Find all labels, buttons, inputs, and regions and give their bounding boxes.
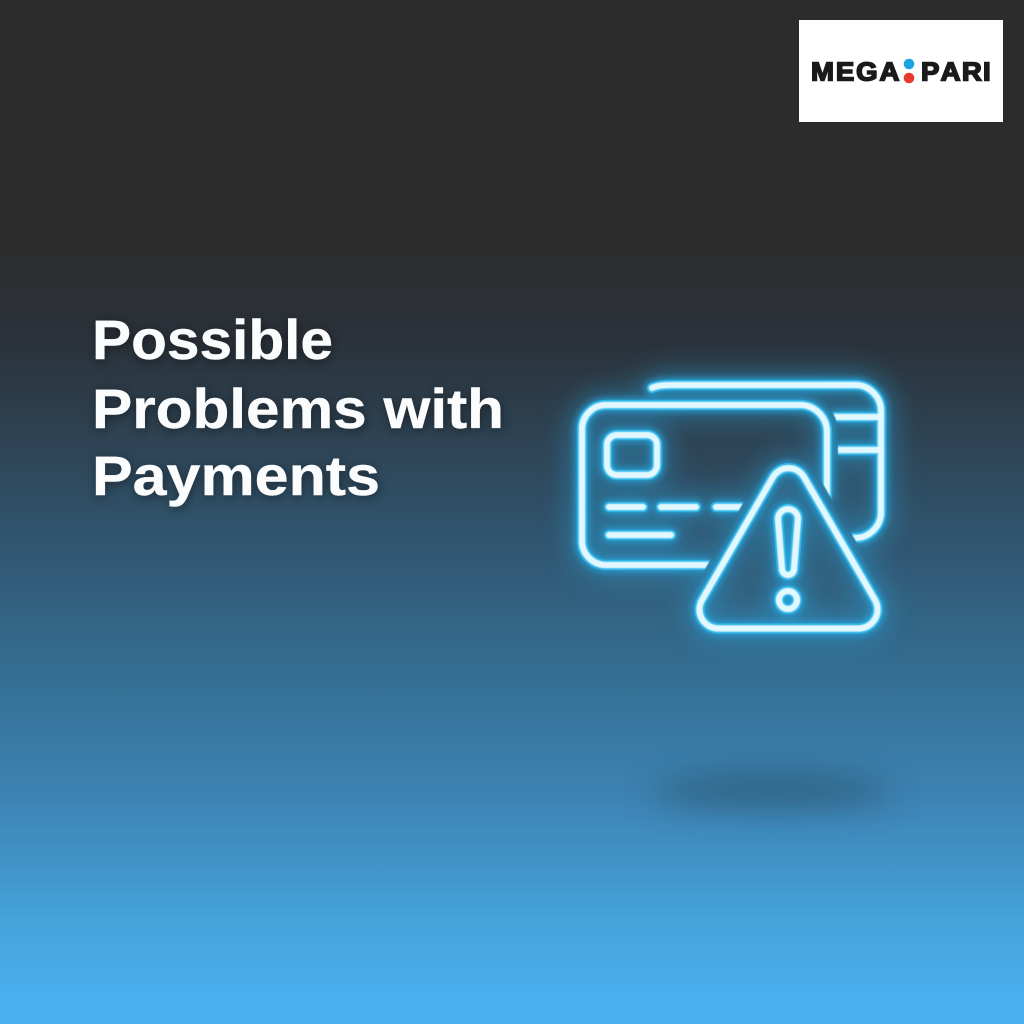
title shadow	[93, 310, 505, 509]
title: Problems with	[92, 377, 504, 440]
title: Payments	[92, 444, 380, 507]
title	[92, 308, 504, 507]
icon: neon credit cards with warning triangle	[582, 385, 881, 628]
logo dot: red	[904, 73, 914, 83]
shadow under icon	[650, 776, 894, 806]
title shadow: Problems with	[93, 379, 505, 442]
title shadow: Possible	[93, 310, 334, 373]
logo	[799, 20, 1003, 122]
title: Possible	[92, 308, 333, 371]
title shadow: Payments	[93, 446, 381, 509]
logo wordmark: MEGA: MEGA	[811, 57, 901, 86]
logo wordmark: PARI: PARI	[921, 57, 992, 86]
logo dot: blue	[904, 59, 914, 69]
